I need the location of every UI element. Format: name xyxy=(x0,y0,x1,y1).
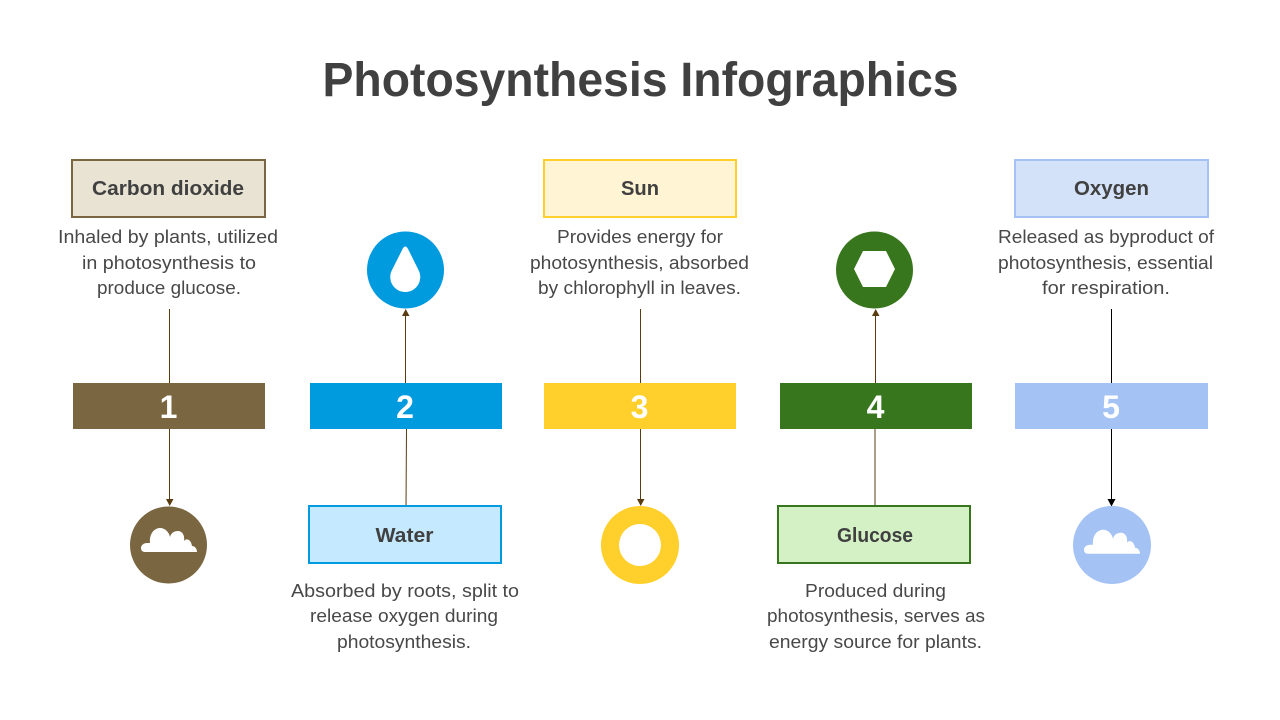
text: glucose description: photosynthesis, serves as xyxy=(767,606,985,626)
number bar 5 xyxy=(1015,383,1208,429)
title: Photosynthesis Infographics xyxy=(322,54,958,107)
number bar 3: 3 xyxy=(631,389,648,425)
text: sun description: Provides energy for xyxy=(557,227,723,247)
panel: step 3 sun xyxy=(530,160,749,584)
heading: glucose: Glucose xyxy=(837,525,913,547)
panel: step 2 water xyxy=(291,232,519,652)
heading: carbon dioxide: Carbon dioxide xyxy=(92,178,244,200)
text: carbon dioxide description: Inhaled by plants, utilized xyxy=(58,227,278,247)
text: oxygen description: Released as byproduct of xyxy=(998,227,1215,247)
icon: sun ring xyxy=(601,506,679,584)
connector: description to bar xyxy=(1110,309,1112,383)
number bar 1 xyxy=(73,383,265,429)
text: carbon dioxide description: produce glucose. xyxy=(97,278,241,298)
text: sun description: by chlorophyll in leaves. xyxy=(538,278,741,298)
connector: glucose box to bar xyxy=(874,429,876,506)
panel: step 5 oxygen xyxy=(998,160,1215,584)
text: sun description: photosynthesis, absorbed xyxy=(530,253,749,273)
number bar 4 xyxy=(780,383,972,429)
number bar 1: 1 xyxy=(160,389,177,425)
text: oxygen description xyxy=(998,227,1215,298)
icon: hexagon xyxy=(836,232,913,308)
connector: description to bar xyxy=(640,309,642,383)
text: water description: Absorbed by roots, split to xyxy=(291,581,519,601)
number bar 4: 4 xyxy=(867,389,885,425)
heading: water: Water xyxy=(376,525,434,547)
arrow: bar to sun xyxy=(637,429,644,506)
text: water description xyxy=(291,581,519,652)
heading: oxygen xyxy=(1015,160,1208,217)
icon: cloud xyxy=(130,506,207,584)
number bar 5: 5 xyxy=(1102,389,1120,425)
text: carbon dioxide description xyxy=(58,227,278,298)
text: water description: release oxygen during xyxy=(310,606,498,626)
heading: glucose xyxy=(778,506,970,563)
panel: step 4 glucose xyxy=(767,232,985,652)
text: carbon dioxide description: in photosynthesis to xyxy=(82,253,256,273)
heading: carbon dioxide xyxy=(72,160,265,217)
number bar 2: 2 xyxy=(396,389,414,425)
arrow: bar to water drop xyxy=(402,309,410,383)
text: oxygen description: for respiration. xyxy=(1042,278,1170,298)
icon: water drop xyxy=(367,232,444,308)
panel: step 1 carbon dioxide xyxy=(58,160,278,584)
heading: sun: Sun xyxy=(621,178,659,200)
icon: cloud xyxy=(1073,506,1151,584)
arrow: bar to cloud xyxy=(166,429,174,506)
text: sun description xyxy=(530,227,749,298)
text: glucose description xyxy=(767,581,985,652)
heading: oxygen: Oxygen xyxy=(1074,178,1149,200)
connector: water box to bar xyxy=(405,429,408,506)
text: water description: photosynthesis. xyxy=(337,632,471,652)
text: glucose description: energy source for plants. xyxy=(769,632,982,652)
connector: description to bar xyxy=(168,309,170,383)
text: glucose description: Produced during xyxy=(805,581,946,601)
number bar 2 xyxy=(310,383,502,429)
text: oxygen description: photosynthesis, essential xyxy=(998,253,1213,273)
arrow: bar to hexagon xyxy=(872,309,880,383)
arrow: bar to cloud xyxy=(1108,429,1116,506)
number bar 3 xyxy=(544,383,736,429)
heading: water xyxy=(309,506,501,563)
heading: sun xyxy=(544,160,736,217)
